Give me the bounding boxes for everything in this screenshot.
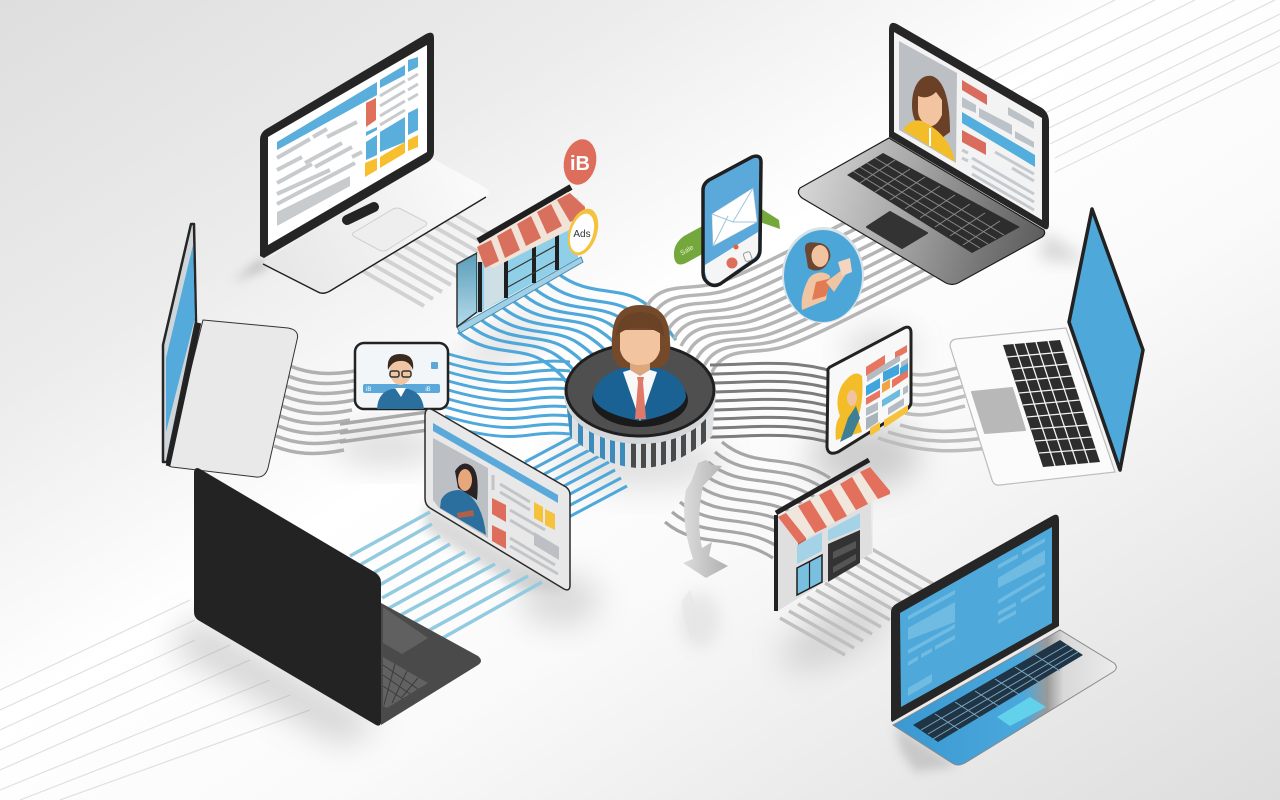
central pedestal xyxy=(564,346,716,468)
roof bar xyxy=(776,460,869,513)
glowing trackpad xyxy=(997,697,1046,726)
closed dark lid xyxy=(194,468,381,726)
pale panel xyxy=(484,254,504,310)
store with glass front, upper xyxy=(457,136,604,333)
left dark edge xyxy=(774,515,778,611)
tie xyxy=(635,377,646,419)
caption bars xyxy=(363,384,440,393)
blue panel xyxy=(166,245,195,432)
connection lines: person to phone and circle xyxy=(646,205,946,372)
awning xyxy=(778,467,890,545)
soft drop shadows xyxy=(170,232,1090,772)
yellow haired figure xyxy=(836,373,862,442)
connection lines: video card to person xyxy=(445,353,570,437)
screen xyxy=(1069,209,1143,470)
roof bar xyxy=(478,187,571,241)
connection lines: monitor to store xyxy=(349,200,505,306)
envelope xyxy=(712,188,757,246)
face xyxy=(620,330,660,365)
video call card: iB xyxy=(425,387,431,393)
base xyxy=(381,603,481,725)
hair back xyxy=(612,305,670,368)
floor edge xyxy=(457,257,583,333)
connection lines: person to right tablet xyxy=(710,363,835,444)
badge: red: iB xyxy=(570,153,590,175)
green bubble left: Sale xyxy=(679,244,695,257)
trackpad xyxy=(972,388,1025,433)
screen content blocks xyxy=(908,538,1045,696)
monitor base xyxy=(263,158,489,293)
sidebar lines xyxy=(380,74,418,125)
window rails xyxy=(508,246,555,287)
person avatar xyxy=(593,305,686,421)
badge: yellow xyxy=(562,205,604,259)
front glass xyxy=(477,198,578,314)
base xyxy=(950,328,1115,485)
keyboard xyxy=(383,657,428,708)
tablet with colored tiles, right xyxy=(827,327,911,453)
shadow below tablet xyxy=(425,503,570,590)
connection lines: store to person xyxy=(458,272,676,400)
laptop base xyxy=(798,138,1045,284)
window xyxy=(797,555,822,595)
device: laptop, bottom right xyxy=(891,515,1116,765)
screen xyxy=(900,527,1052,707)
blue header xyxy=(433,423,558,503)
phone icons xyxy=(726,258,738,268)
text lines xyxy=(277,122,362,204)
trackpad xyxy=(867,212,927,248)
connection lines: right tablet to right laptop xyxy=(878,366,988,451)
man xyxy=(377,354,424,409)
keyboard xyxy=(1003,340,1100,467)
connection lines: person to tablet xyxy=(525,430,627,518)
ribbed cylinder xyxy=(566,392,716,468)
device: laptop, top right xyxy=(798,23,1049,284)
fringe xyxy=(616,312,664,336)
connection lines: person to lower store xyxy=(665,442,830,558)
curved silver arrow xyxy=(682,460,728,640)
red icons xyxy=(492,498,506,522)
connection lines: left laptop to video card xyxy=(274,366,360,453)
monitor screen xyxy=(268,45,427,245)
phone body xyxy=(703,156,761,285)
power button xyxy=(347,207,374,220)
device: laptop, left, seen from side xyxy=(163,224,298,477)
text lines xyxy=(962,150,1034,210)
base xyxy=(168,320,298,477)
hole xyxy=(592,373,688,427)
shoulders xyxy=(593,368,686,421)
neck xyxy=(630,360,650,376)
device: black laptop, bottom left xyxy=(194,468,481,726)
gray text lines xyxy=(493,475,558,574)
trackpad xyxy=(352,208,427,251)
base xyxy=(893,630,1116,765)
silver rim xyxy=(564,344,716,444)
green tag right xyxy=(760,208,780,229)
side glass xyxy=(457,253,477,327)
badge: red xyxy=(560,136,600,188)
photo panel xyxy=(433,438,488,538)
video call card xyxy=(355,343,448,409)
side wall xyxy=(860,484,873,560)
circle avatar: woman xyxy=(782,227,864,323)
content blocks xyxy=(962,80,1035,167)
awning xyxy=(477,192,585,268)
yellow blocks xyxy=(534,502,543,523)
woman portrait xyxy=(899,41,957,163)
badge: yellow: Ads xyxy=(573,229,591,240)
device: desktop monitor, top left xyxy=(260,33,489,293)
header bar xyxy=(277,82,377,150)
smartphone with envelope xyxy=(674,156,780,285)
door xyxy=(828,530,860,582)
gray block xyxy=(534,532,559,560)
blue window band xyxy=(797,532,822,564)
connection lines: tablet to black laptop xyxy=(350,512,542,644)
device: laptop, right, seen from side xyxy=(950,209,1143,485)
keyboard xyxy=(913,640,1083,742)
hinge xyxy=(168,323,199,466)
facade xyxy=(776,466,872,612)
store with striped awning, lower xyxy=(776,460,890,612)
keyboard xyxy=(847,153,1020,253)
woman xyxy=(440,463,486,535)
shirt xyxy=(623,367,657,421)
tiles xyxy=(866,345,908,436)
window posts xyxy=(480,224,557,312)
lower white panel xyxy=(705,232,758,283)
small labels: iB xyxy=(366,387,371,393)
monitor bezel xyxy=(260,33,434,258)
trackpad xyxy=(383,607,428,654)
sidebar blocks xyxy=(365,57,418,177)
bezel xyxy=(891,515,1059,722)
dark top xyxy=(566,344,714,436)
bezel xyxy=(889,23,1049,229)
tablet profile card xyxy=(425,409,570,590)
connection lines: lower store to bottom laptop xyxy=(780,548,935,655)
screen xyxy=(894,32,1042,220)
screen shell xyxy=(163,224,196,462)
